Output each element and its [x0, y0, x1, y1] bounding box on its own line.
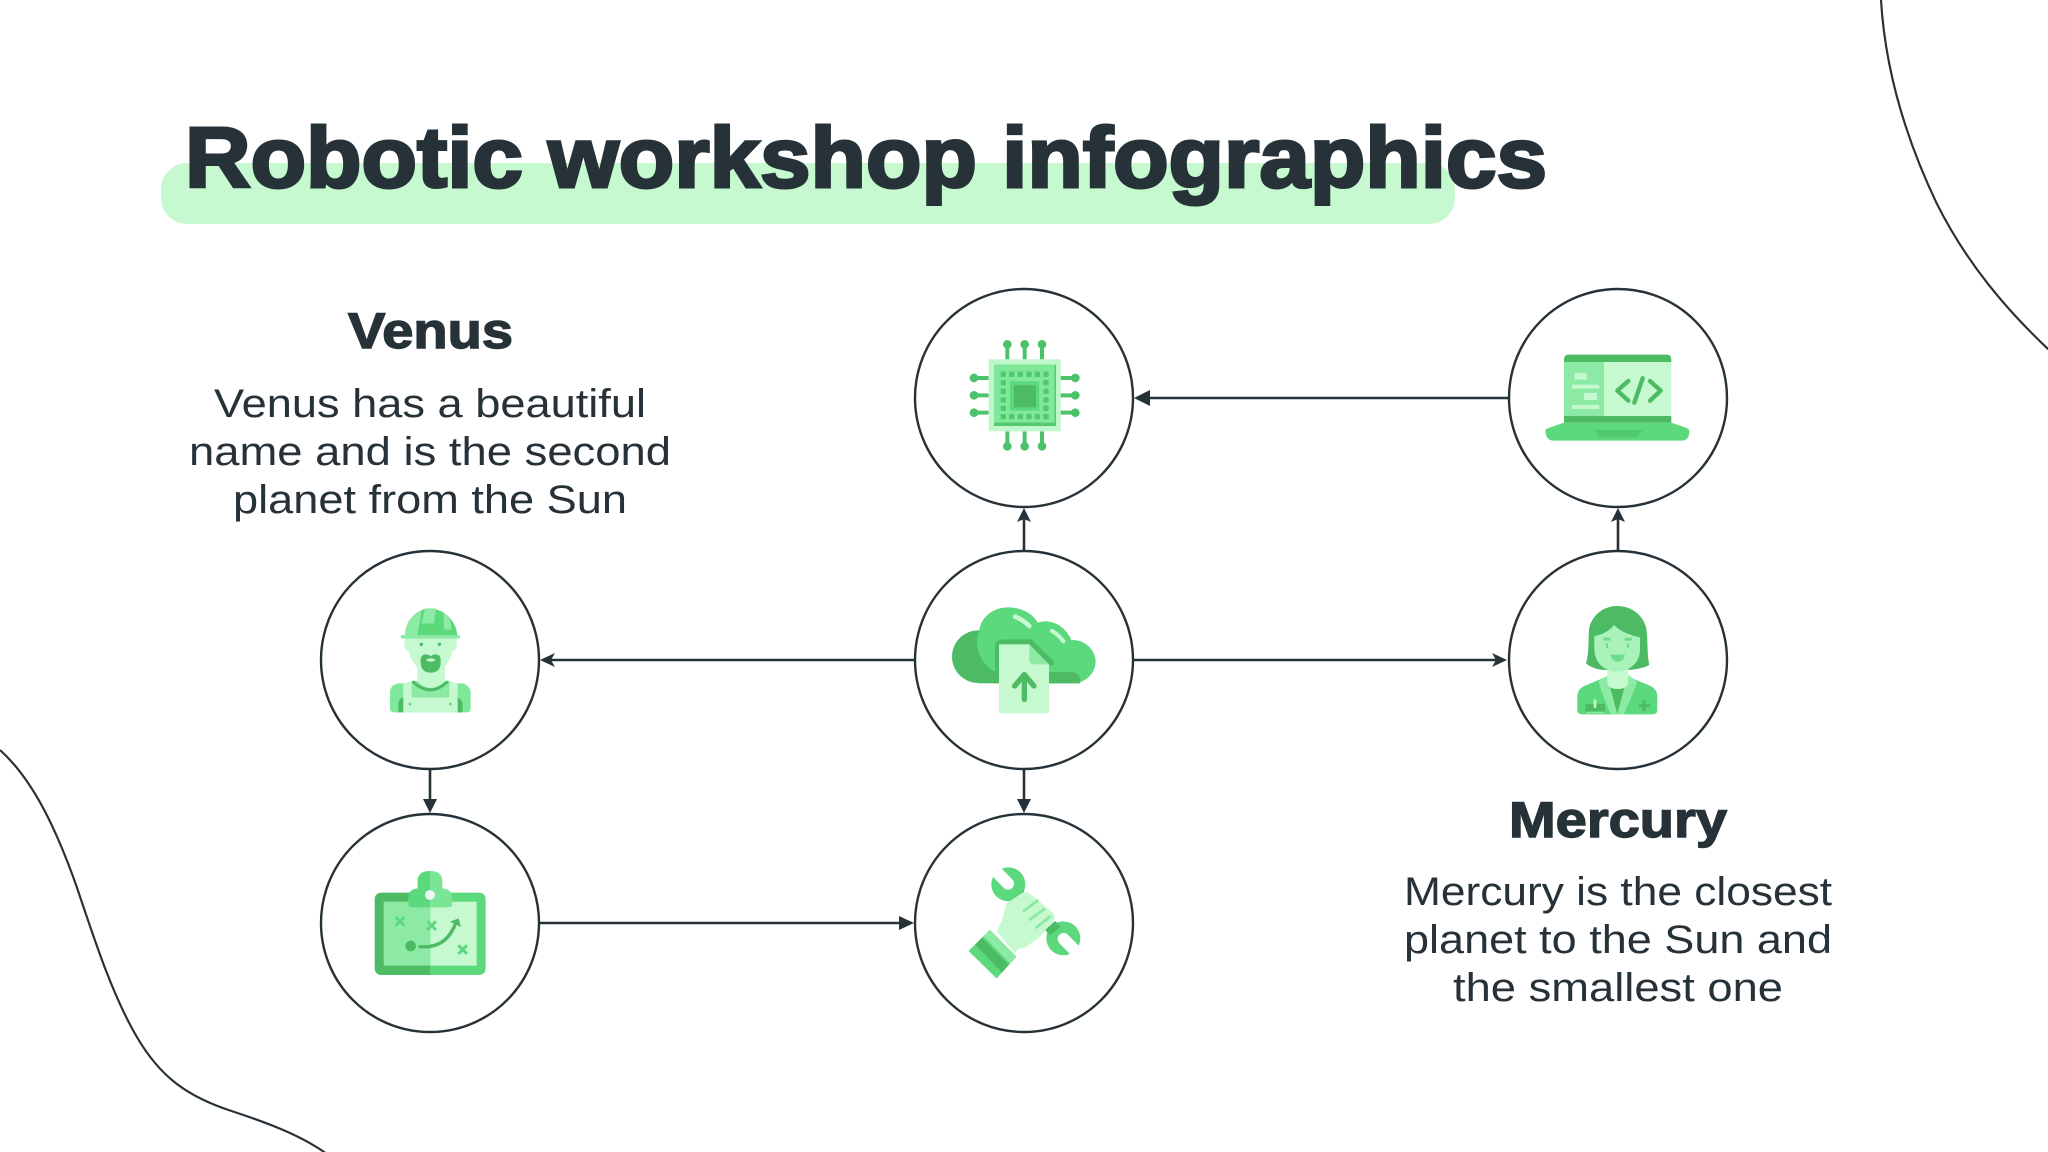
- node: woman: [1509, 551, 1727, 769]
- heading: Venus: Venus: [348, 303, 513, 359]
- body: Mercury description: planet to the Sun and: [1404, 918, 1832, 962]
- icon: woman engineer: [1577, 606, 1657, 714]
- node: chip: [915, 289, 1133, 507]
- body: Venus description: [189, 382, 671, 522]
- node: strategy board: [321, 814, 539, 1032]
- icon: cloud with document: [952, 607, 1096, 713]
- decorative curve: top right: [1881, 0, 2048, 349]
- node: wrench: [915, 814, 1133, 1032]
- decorative curve: bottom left: [0, 750, 325, 1152]
- icon: worker with helmet: [390, 608, 471, 712]
- arrow: woman to laptop: [1611, 508, 1625, 551]
- text block: Venus: [189, 303, 671, 522]
- body: Mercury description: the smallest one: [1453, 966, 1783, 1010]
- body: Mercury description: [1404, 870, 1832, 1010]
- icon: hand with wrench: [969, 863, 1083, 978]
- node: worker: [321, 551, 539, 769]
- body: Mercury description: Mercury is the closest: [1404, 870, 1832, 914]
- title highlight: [161, 163, 1455, 224]
- node: cloud upload: [915, 551, 1133, 769]
- arrow: worker to board: [423, 769, 437, 813]
- arrow: cloud to worker: [540, 653, 914, 667]
- arrow: board to wrench: [539, 916, 914, 930]
- arrow: cloud to wrench: [1017, 769, 1031, 813]
- arrow: cloud to chip: [1017, 508, 1031, 551]
- text block: Mercury: [1404, 792, 1832, 1010]
- node: laptop: [1509, 289, 1727, 507]
- body: Venus description: name and is the second: [189, 430, 671, 474]
- body: Venus description: Venus has a beautiful: [214, 382, 646, 426]
- title: Robotic workshop infographics: [185, 111, 1547, 206]
- arrow: laptop to chip: [1134, 390, 1508, 406]
- icon: laptop with code: [1545, 355, 1689, 441]
- icon: microchip: [970, 340, 1080, 451]
- body: Venus description: planet from the Sun: [233, 478, 627, 522]
- icon: strategy clipboard: [375, 871, 486, 975]
- arrow: cloud to woman: [1133, 653, 1507, 667]
- heading: Mercury: Mercury: [1509, 792, 1727, 848]
